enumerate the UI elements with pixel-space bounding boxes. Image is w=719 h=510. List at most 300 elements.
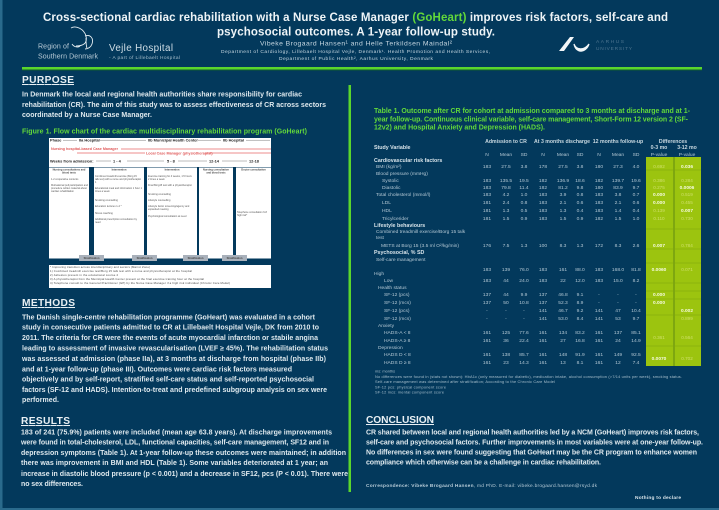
p-value highlight block (646, 157, 701, 366)
column: intervention phase IIa: Stress coaching (95, 212, 113, 215)
p-values: 0.002 (681, 308, 693, 314)
table values: 180 (595, 164, 603, 170)
table values: 3.8 (521, 164, 528, 170)
table values: 183 (483, 164, 491, 170)
table values: 88.0 (575, 267, 585, 273)
logo: Region of Southern Denmark (38, 27, 98, 60)
flow chart header: 12-14 (209, 158, 220, 164)
column: nursing consultations: Motivational pull participation and (51, 184, 89, 187)
column: intervention phase IIb: Exercise training for 4 weeks, 1.5 hours (148, 175, 193, 178)
table values: 161 (595, 330, 603, 336)
table footnotes: Self-care management was determined after stratification; According to the Chronic Care Model (375, 379, 555, 384)
table values: 12.0 (575, 278, 585, 284)
column: nursing consultations: blood tests (62, 170, 76, 174)
table values: 8.4 (577, 316, 584, 322)
table values: 46.7 (558, 308, 568, 314)
table values: 183 (539, 267, 547, 273)
logo: Aarhus University: AARHUS (596, 39, 624, 45)
table footnotes: No differences were found in (stats not shown): HbA1c (only measured for diabetic), medication intake, alcohol consumption (>7/14 units per week), smoking status. (375, 374, 682, 379)
p-values: 0.784 (681, 243, 693, 248)
column: intervention phase IIb: Final Borg15 test with a physiotherapist (148, 184, 192, 187)
row labels: test (376, 235, 385, 241)
table values: 137 (539, 300, 547, 306)
p-values: 0.000 (653, 192, 665, 198)
table values: 14.9 (631, 338, 641, 344)
table values: 139.7 (612, 178, 624, 184)
flow chart (49, 138, 271, 288)
text block: results: no sex differences. (21, 481, 83, 488)
column: intervention phase IIa: Combined treadmill exercise (Borg 15 (95, 175, 137, 178)
table values: - (486, 317, 488, 322)
table values: 161 (539, 330, 547, 336)
table values: 8.9 (577, 300, 584, 306)
logo: Region of Southern Denmark: Region of (38, 44, 69, 50)
table caption: year follow-up. Continuous clinical variable, self-care management, Short-Form 12 version 2 (SF- (374, 116, 689, 123)
row labels: Lifestyle behaviours (374, 223, 425, 229)
flow chart footnotes: * Improving transition across interdisciplinary and sectors (Marrot Zone) (50, 265, 150, 269)
table values: 139 (502, 267, 510, 273)
table values: 1.0 (521, 192, 528, 198)
table values: 1.5 (503, 216, 510, 222)
table values: 183 (595, 278, 603, 284)
column: nursing consultations: 1-2 cooperative contents (51, 178, 79, 181)
table values: 168.0 (612, 267, 624, 273)
table values: 81.8 (631, 267, 641, 273)
table values: 161 (539, 360, 547, 366)
table values: 22.4 (519, 338, 529, 344)
table values: 161 (483, 338, 491, 344)
table footnotes: SF-12 pcs: physical component score (375, 384, 446, 390)
text block: methods: and at 1-year follow-up (phase III). Outcomes were cardiac risk factors measured (22, 366, 292, 373)
table values: 8.1 (577, 360, 584, 366)
flow chart header: 1 - 4 (113, 158, 122, 164)
row labels: Total cholesterol (mmol/l) (376, 192, 431, 198)
row labels: Diastolic (382, 185, 401, 191)
table values: 11.4 (519, 185, 529, 191)
text block: methods: was assessed at admission (phase IIa), at 3 months at discharge from hospital (phase IIb) (21, 356, 326, 363)
authors and affiliations: Vibeke Brogaard Hansen¹ and Helle Terkildsen Maindal² (260, 40, 453, 48)
flow chart header: IIb Municipal Health Center (148, 138, 198, 142)
column: intervention phase IIa: Additional prescription consultation by (95, 218, 138, 221)
table values: 15.0 (613, 278, 623, 284)
flow chart footnotes: 2) Asbestos present in the educational course 2 (50, 273, 118, 277)
p-values: 0.386 (653, 178, 665, 183)
table values: 2.1 (615, 200, 622, 206)
table header: Mean (557, 152, 569, 158)
authors and affiliations (221, 40, 490, 62)
column: nursing consultations (49, 168, 89, 258)
table values: 182 (595, 178, 603, 184)
text block: purpose: rehabilitation (CR). The aim of this study was to assess effectiveness of CR across sectors (22, 102, 326, 109)
column: intervention phase IIa: need (95, 221, 101, 224)
table header (374, 139, 697, 158)
table values: 9.8 (577, 185, 584, 191)
text block: methods: leading to assessment of invasive revascularisation (LVEF ≥ 45%). The rehabilitation status (22, 346, 328, 352)
row labels: SF-12 (mcs) (384, 300, 411, 306)
column: intervention phase IIa: talk test) with a nurse and physiotherapist (95, 178, 141, 181)
table values: 85.7 (519, 352, 529, 358)
table values: 137 (483, 300, 491, 306)
title (43, 12, 668, 38)
p-values: 0.692 (653, 164, 665, 169)
table values: 47 (615, 308, 621, 314)
table values: 0.8 (577, 192, 584, 198)
row labels: Systolic (382, 178, 399, 184)
p-values: 0.0006 (680, 185, 695, 191)
column: nursing consultations: procedure written material about (51, 187, 87, 190)
p-values: 0.702 (681, 356, 693, 361)
row labels: Anxiety (378, 323, 395, 329)
row labels: SF-12 (pcs) (384, 292, 410, 298)
table values: 183 (483, 267, 491, 273)
text block: methods: objectively and by self-report, stratified self-care status and self-reported psychosocial (22, 376, 314, 384)
row labels: Depression (378, 345, 403, 351)
flow chart header (49, 138, 271, 167)
text block: methods: 2011. The criteria for CR were the events of acute myocardial infarction or stabile angina (22, 335, 318, 342)
flow chart footnotes (49, 265, 271, 288)
table header: 12 months follow-up (593, 139, 643, 145)
table values: 161 (559, 267, 567, 273)
table values: 181 (483, 200, 491, 206)
table values: 0.9 (521, 216, 528, 222)
logo: Vejle Hospital: - A part of Lillebaelt Hospital (109, 55, 180, 61)
table values: 44 (503, 292, 509, 298)
table values: 92.5 (631, 352, 641, 358)
table values: 91.9 (575, 352, 585, 358)
table header: P-value (651, 152, 668, 158)
table values: 1.5 (615, 216, 622, 222)
table values: 13 (560, 360, 566, 366)
table values: 19.5 (519, 178, 529, 184)
table values: 183 (483, 178, 491, 184)
stratification buttons: Stratification (227, 256, 243, 260)
row labels: LDL (382, 200, 391, 206)
table values: 183 (595, 192, 603, 198)
table values: 52.3 (558, 300, 568, 306)
column: nursing consultations: cardiac rehabilitation (51, 190, 75, 193)
table values: 10.4 (631, 308, 641, 314)
table values: 0.7 (633, 192, 640, 198)
table values: 0.4 (577, 208, 584, 214)
column: intervention phase IIa: Educational meal and information 1 hour 1 (95, 187, 143, 190)
table values: 2.6 (633, 243, 640, 249)
logo: Region of Southern Denmark: Southern Denmark (38, 54, 98, 60)
row labels: Psychosocial, % SD (374, 250, 425, 256)
authors and affiliations: Department of Cardiology, Lillebaelt Hospital Vejle, Denmark¹. Health Promotion and Health Services, (221, 49, 490, 55)
row labels: HADS-A ≥ 8 (384, 338, 411, 344)
authors and affiliations: Department of Public Health², Aarhus University, Denmark (279, 56, 434, 62)
table values: 183 (539, 216, 547, 222)
table values: - (505, 309, 507, 314)
table values: 141 (539, 316, 547, 322)
table values: 141 (595, 316, 603, 322)
table values: 4.2 (503, 192, 510, 198)
table values: 0.5 (521, 208, 528, 214)
logo: Vejle Hospital: Vejle Hospital (109, 43, 173, 54)
column: doctor consultation: high risk* (237, 214, 247, 217)
table values: 0.4 (633, 208, 640, 214)
table values: 53.0 (558, 316, 568, 322)
text block: purpose (22, 92, 326, 119)
row labels: METS at Borg 15 (3.5 ml O²/kg/min) (381, 243, 459, 249)
table values: 3.9 (560, 192, 567, 198)
table footnotes (375, 368, 682, 394)
table values: 36 (503, 338, 509, 344)
p-values: 0.361 (653, 335, 665, 340)
table values: - (486, 309, 488, 314)
table values: 182 (539, 178, 547, 184)
table values: 2.1 (560, 200, 567, 206)
row labels: BMI (kg/m²) (376, 164, 402, 170)
table values: - (635, 293, 637, 298)
table values: - (598, 293, 600, 298)
table header: 0-3 mo (651, 145, 667, 151)
table values: 18.6 (575, 178, 585, 184)
table values: 27.5 (501, 164, 511, 170)
table values: 19.6 (631, 178, 641, 184)
text block: results: increase in diastolic blood pressure (p < 0.001) and a decrease in SF12, pcs (P < 0.01). There were (21, 471, 348, 478)
table values: 183 (539, 200, 547, 206)
flow chart header: IIb Hospital (223, 138, 244, 142)
p-values: 0.007 (653, 243, 665, 249)
table values: 0.8 (521, 200, 528, 206)
table caption (374, 108, 691, 132)
table values: 50 (503, 300, 509, 306)
table header: Admission to CR (485, 139, 527, 145)
table values: 22 (560, 278, 566, 284)
table header: Mean (500, 152, 512, 158)
p-values: 0.110 (653, 216, 665, 221)
table header: 3-12 mo (677, 145, 697, 151)
table values: 9.7 (633, 316, 640, 322)
p-values: 0.000 (653, 300, 665, 306)
row labels: Self-care management (376, 257, 426, 263)
table values: 9.7 (633, 185, 640, 191)
table values: 83.9 (613, 185, 623, 191)
text block: results: depression symptoms (Table 1). At 1-year follow-up these outcomes were maintained; in addition (21, 450, 346, 457)
table values: 183 (539, 192, 547, 198)
column: intervention phase IIb: 2 times a week (148, 178, 165, 181)
text block: purpose: coordinated by a Nurse Case Manager. (22, 112, 152, 119)
table values: 9.2 (577, 308, 584, 314)
logo: Vejle Hospital (109, 43, 180, 61)
text block: conclusion: CR shared between local and regional health authorities led by a NCM (GoHeart) improves risk factors, (366, 430, 699, 436)
column: intervention phase IIa: Intervention (112, 168, 127, 172)
table values: 3.8 (577, 164, 584, 170)
flow chart footnotes: 3) A physiotherapist from the Municipal Health Center present at the final exercise training hour at the hospital (50, 277, 204, 281)
table header: Mean (612, 152, 624, 158)
row labels: SF-12 (mcs) (384, 316, 411, 322)
table values: 183 (539, 278, 547, 284)
correspondence: Correspondence: Vibeke Brogaard Hansen, md PhD. E-mail: vibeke.brogaard.hansen@rsyd.dk (366, 483, 598, 489)
table values: 141 (539, 308, 547, 314)
stratification buttons: Stratification (188, 256, 204, 260)
table values: 148 (559, 352, 567, 358)
p-values: 0.455 (681, 200, 693, 205)
text block: conclusion: compliance which otherwise can be a challenge in cardiac rehabilitation. (366, 460, 601, 466)
table values: - (617, 301, 619, 306)
row labels: Blood pressure (mmHg) (376, 171, 428, 177)
table header: Differences (659, 139, 687, 145)
table values: 2.4 (503, 200, 510, 206)
row labels: HDL (382, 208, 392, 214)
table header: N (597, 152, 601, 158)
table values: 9.1 (577, 292, 584, 298)
table values: 1.3 (503, 208, 510, 214)
column: intervention phase IIb: Lifestyle factor screening/agency and (148, 205, 190, 208)
text block: conclusion: self-care and psychosocial factors. Further improvements in most variables were at one-year follow-up. (366, 440, 703, 446)
table header: P-value (679, 152, 696, 158)
table values: 8.2 (633, 278, 640, 284)
table values: 1.3 (521, 243, 528, 249)
disclosure: Nothing to declare (635, 495, 681, 501)
table header: SD (521, 152, 528, 158)
table header: N (541, 152, 545, 158)
table header: At 3 months discharge (534, 139, 590, 145)
row labels (374, 158, 466, 366)
heading: results: RESULTS (21, 416, 70, 427)
table values: 100 (539, 243, 547, 249)
flow chart header: Local Case Manager (physiotherapist) (146, 152, 213, 156)
table values: 14.3 (519, 360, 529, 366)
logo: Aarhus University: UNIVERSITY (596, 46, 633, 52)
column: intervention phase IIb: Psychological consultation at need (148, 215, 187, 218)
column: nursing consultation and blood tests: and blood tests (206, 170, 226, 174)
table values: 161 (483, 352, 491, 358)
table values: 46.8 (558, 292, 568, 298)
text block: results (20, 430, 348, 488)
p-values: 0.899 (681, 316, 693, 321)
p-values: 0.275 (653, 185, 665, 190)
table values: 76.0 (519, 267, 529, 273)
table values: - (505, 317, 507, 322)
table values: 1.5 (560, 216, 567, 222)
column: nursing consultation and blood tests (199, 168, 233, 258)
p-values: 0.0070 (652, 356, 667, 362)
row labels: HADS D < 8 (384, 352, 411, 358)
table caption: 12v2) and Hospital Anxiety and Depression (HADS). (374, 124, 545, 132)
p-values: 0.000 (653, 200, 665, 206)
row labels: High (374, 271, 384, 277)
table values: 182 (595, 216, 603, 222)
table header: Study Variable (374, 145, 411, 151)
stratification buttons: Stratification (84, 256, 100, 260)
column: intervention phase IIb: Smoking counselling (148, 193, 172, 196)
p-values: 0.139 (653, 208, 665, 213)
text block: methods: study in consecutive patients admitted to CR at Lillebaelt Hospital Vejle, DK from 2010 to (22, 325, 319, 332)
column: intervention phase IIa: times a week (95, 190, 110, 193)
row labels: SF-12 (pcs) (384, 308, 410, 314)
table values: 161 (483, 360, 491, 366)
stratification buttons (79, 255, 247, 261)
table values: 137 (483, 292, 491, 298)
column: intervention phase IIa: Education lectures 1-4 * (95, 205, 122, 208)
flow chart header: Weeks from admission: (50, 158, 94, 164)
table values: 24 (615, 338, 621, 344)
title: Cross-sectional cardiac rehabilitation with a Nurse Case Manager (GoHeart) improves risk factors, self-care and (43, 12, 668, 24)
table values: 183 (483, 192, 491, 198)
table values: 172 (595, 243, 603, 249)
p-values: 0.0060 (652, 267, 667, 273)
table values: 176 (483, 243, 491, 249)
column: doctor consultation (236, 168, 271, 258)
table values: 125 (502, 330, 510, 336)
column: intervention phase IIb: expanded meeting (148, 208, 169, 211)
table values: 27.3 (613, 164, 623, 170)
column: intervention phase IIb (147, 168, 197, 258)
column: intervention phase IIb: Lifestyle counselling (148, 199, 171, 202)
table values: 181 (483, 216, 491, 222)
text block: purpose: In Denmark the local and regional health authorities share responsibility for cardiac (22, 92, 302, 98)
table caption: Table 1. Outcome after CR for cohort at admission compared to 3 months at discharge and at 1- (374, 108, 691, 115)
text block: conclusion (366, 430, 703, 466)
column: intervention phase IIa (94, 168, 144, 258)
table values: 141 (595, 308, 603, 314)
flow chart header: Phase (50, 138, 62, 142)
table footnotes: ms: months (375, 368, 395, 374)
table: outcomes (374, 139, 701, 366)
table values: 183 (539, 208, 547, 214)
stratification buttons: Stratification (137, 256, 153, 260)
table values: 183 (483, 185, 491, 191)
p-values: 0.007 (681, 208, 693, 214)
table values: 0.6 (577, 200, 584, 206)
table values: 161 (483, 330, 491, 336)
row labels: Tricylcerider (382, 216, 409, 222)
table values: 53 (615, 316, 621, 322)
flow chart footnotes: 1) Combined treadmill exercise test/Borg 15 talk test with a nurse and physiotherapist at the hospital (50, 269, 192, 273)
flow chart header: 12-18 (249, 158, 260, 164)
table values: - (523, 309, 525, 314)
logo: Aarhus University (559, 37, 633, 52)
row labels: HADS-A < 8 (384, 330, 411, 336)
table values: 181 (483, 208, 491, 214)
table values: 161 (539, 338, 547, 344)
table values: 24.0 (519, 278, 529, 284)
p-values: 0.519 (681, 192, 693, 197)
table values: 0.6 (633, 200, 640, 206)
p-values (652, 164, 695, 362)
heading: methods: METHODS (22, 298, 75, 309)
table values: 149 (614, 352, 622, 358)
p-values: 0.036 (681, 164, 693, 170)
table values: 1.0 (633, 216, 640, 222)
table values: 44 (503, 278, 509, 284)
table values: - (598, 301, 600, 306)
table values: 161 (595, 352, 603, 358)
table values: 9.9 (521, 292, 528, 298)
table values: 85.1 (631, 330, 641, 336)
table values: 1.4 (615, 208, 622, 214)
table values (483, 164, 641, 366)
p-values: 0.000 (653, 292, 665, 298)
text block: results: 183 of 241 (75.9%) patients were included (mean age 63.8 years). At discharge improvements (21, 430, 332, 436)
table values: 10.8 (519, 300, 529, 306)
row labels: Health status (378, 285, 407, 291)
table values: 183 (595, 208, 603, 214)
table values: 1.3 (577, 243, 584, 249)
table values: 77.6 (519, 330, 529, 336)
table values: 161 (539, 352, 547, 358)
title: psychosocial outcomes. A 1-year follow-up study. (217, 26, 495, 38)
row labels: HADS D ≥ 8 (384, 360, 411, 366)
table values: 161 (595, 338, 603, 344)
text block: methods: factors (SF-12 and HADS). Intention-to-treat and predefined subgroup analysis on sex were (22, 387, 327, 394)
table header: N (485, 152, 489, 158)
table values: 138 (502, 352, 510, 358)
table values: 136.9 (557, 178, 569, 184)
column: intervention phase IIb: Intervention (165, 168, 180, 172)
